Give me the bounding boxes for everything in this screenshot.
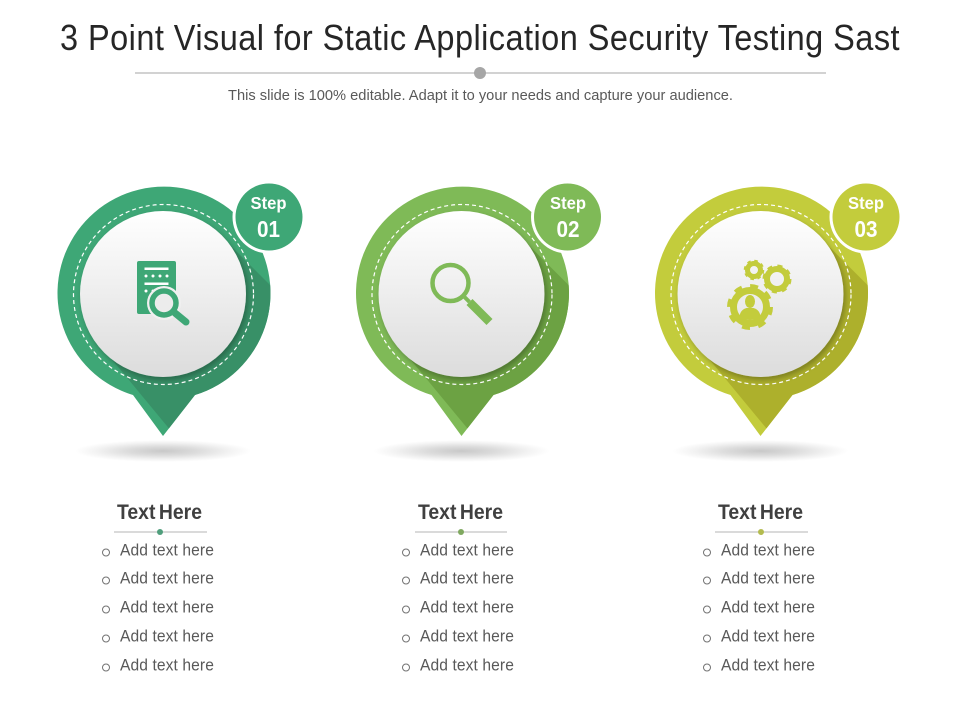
text block: column 3: [704, 501, 815, 674]
bullet list: Add text here: [420, 570, 514, 588]
bullet list: Add text here: [120, 598, 214, 616]
column heading: Text Here: [418, 501, 503, 524]
bullet list: Add text here: [120, 570, 214, 588]
pin body: [655, 187, 868, 436]
pin body: [356, 187, 569, 436]
bullet list: Add text here: [420, 598, 514, 616]
step badge: Step: [250, 193, 286, 213]
pin ground shadow: [672, 440, 848, 462]
step badge: Step: [550, 193, 586, 213]
bullet list: [402, 542, 514, 674]
column heading: Text Here: [718, 501, 803, 524]
dashed ring: [74, 204, 254, 384]
heading divider: [715, 529, 808, 535]
panel: step 01 pin: [58, 184, 302, 460]
step badge: Step: [848, 193, 884, 213]
pin body: [58, 187, 270, 436]
bullet list: Add text here: [721, 598, 815, 616]
bullet list: Add text here: [721, 542, 815, 560]
bullet list: Add text here: [120, 656, 214, 674]
step badge: 03: [854, 216, 878, 242]
text block: column 1: [102, 501, 214, 674]
bullet list: [704, 542, 815, 674]
bullet list: Add text here: [721, 570, 815, 588]
bullet list: Add text here: [420, 656, 514, 674]
title divider: [135, 67, 826, 79]
pin ground shadow: [75, 440, 251, 462]
dashed ring: [671, 204, 851, 384]
bullet list: [102, 542, 214, 674]
step badge: [232, 180, 306, 254]
bullet list: Add text here: [721, 628, 815, 646]
bullet list: Add text here: [420, 628, 514, 646]
panel: step 02 pin: [356, 184, 601, 460]
bullet list: Add text here: [420, 542, 514, 560]
subtitle: This slide is 100% editable. Adapt it to your needs and capture your audience.: [228, 87, 733, 104]
bullet list: Add text here: [120, 542, 214, 560]
dashed ring: [372, 204, 552, 384]
step badge: [531, 180, 604, 254]
inner disc: [678, 211, 844, 377]
icon: gears with person: [729, 261, 790, 328]
column heading: Text Here: [117, 501, 202, 524]
panel: step 03 pin: [655, 184, 900, 460]
step badge: [830, 180, 902, 254]
inner disc: [80, 211, 246, 377]
bullet list: Add text here: [721, 656, 815, 674]
step badge: 01: [257, 216, 280, 242]
inner disc: [378, 211, 544, 377]
heading divider: [114, 529, 207, 535]
bullet list: Add text here: [120, 628, 214, 646]
icon: document with magnifier: [137, 261, 186, 322]
pin long shadow: [112, 246, 270, 428]
heading divider: [415, 529, 507, 535]
pin long shadow: [710, 245, 868, 428]
pin long shadow: [410, 246, 569, 428]
icon: magnifier: [432, 265, 490, 322]
pin ground shadow: [374, 440, 550, 462]
text block: column 2: [402, 501, 514, 674]
step badge: 02: [556, 216, 580, 242]
